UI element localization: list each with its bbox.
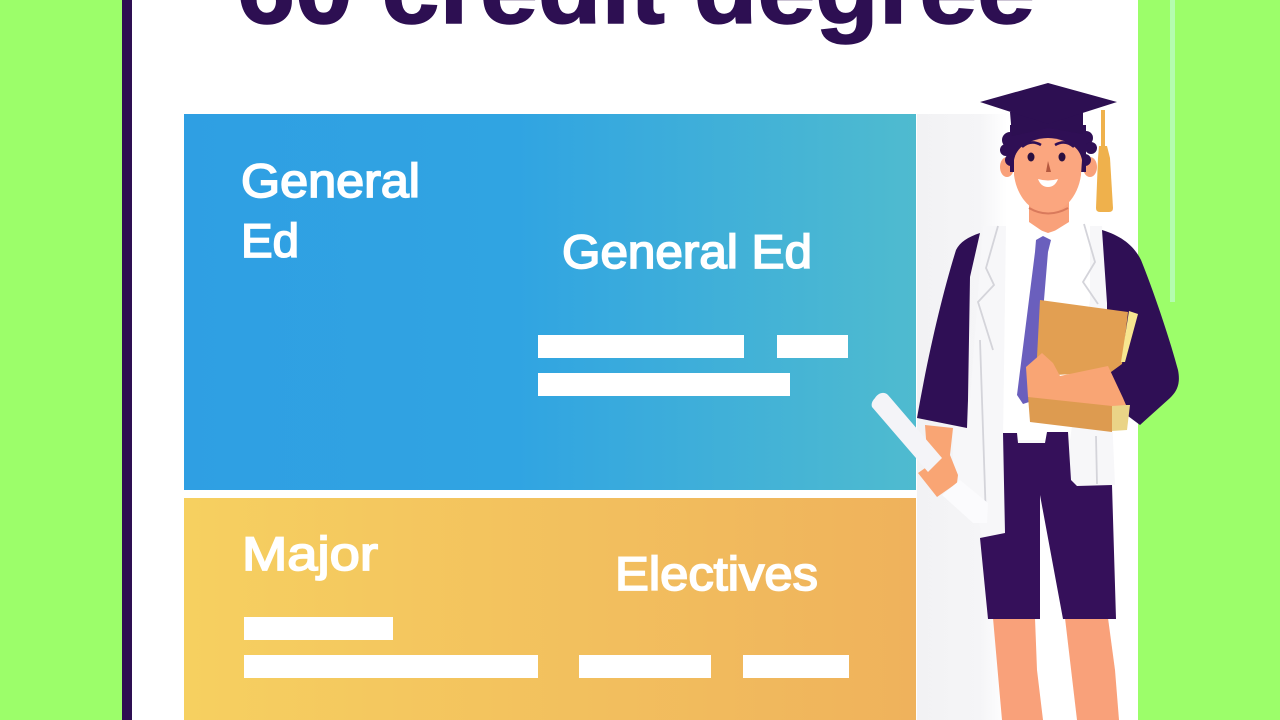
- diploma: [872, 393, 988, 523]
- heading: General Ed left: General: [241, 154, 420, 207]
- collar: [1020, 222, 1078, 246]
- tie: [1017, 236, 1051, 404]
- book: [1028, 300, 1138, 432]
- white gown: [953, 226, 1115, 538]
- face: [1014, 138, 1082, 213]
- facial features: [1022, 142, 1074, 187]
- light vertical stripe: [1170, 0, 1175, 302]
- legs: [993, 618, 1119, 720]
- neck: [1029, 200, 1069, 233]
- text placeholder bars: major and electives: [244, 617, 849, 678]
- heading: Ed left: Ed: [241, 214, 299, 267]
- tassel: [1096, 110, 1113, 212]
- right sleeve: [1102, 230, 1179, 425]
- panel: general education: [184, 114, 916, 490]
- panel: major and electives: [184, 498, 916, 720]
- graduate illustration: [872, 83, 1179, 720]
- shirt: [1003, 226, 1090, 440]
- heading: General Ed right: General Ed: [562, 225, 812, 278]
- left arm and hand: [918, 425, 958, 497]
- hand on book: [1026, 353, 1126, 406]
- shorts: [980, 432, 1116, 619]
- heading: Electives: Electives: [615, 547, 818, 600]
- chin shadow: [1029, 208, 1068, 214]
- heading: Major: Major: [242, 527, 378, 580]
- ears: [1000, 157, 1097, 177]
- hair: [1000, 125, 1097, 172]
- white poster panel: [122, 0, 1138, 720]
- left sleeve: [917, 233, 980, 428]
- graduation cap: [980, 83, 1117, 136]
- lapel lines: [978, 224, 1098, 520]
- text placeholder bars: general ed: [538, 335, 848, 396]
